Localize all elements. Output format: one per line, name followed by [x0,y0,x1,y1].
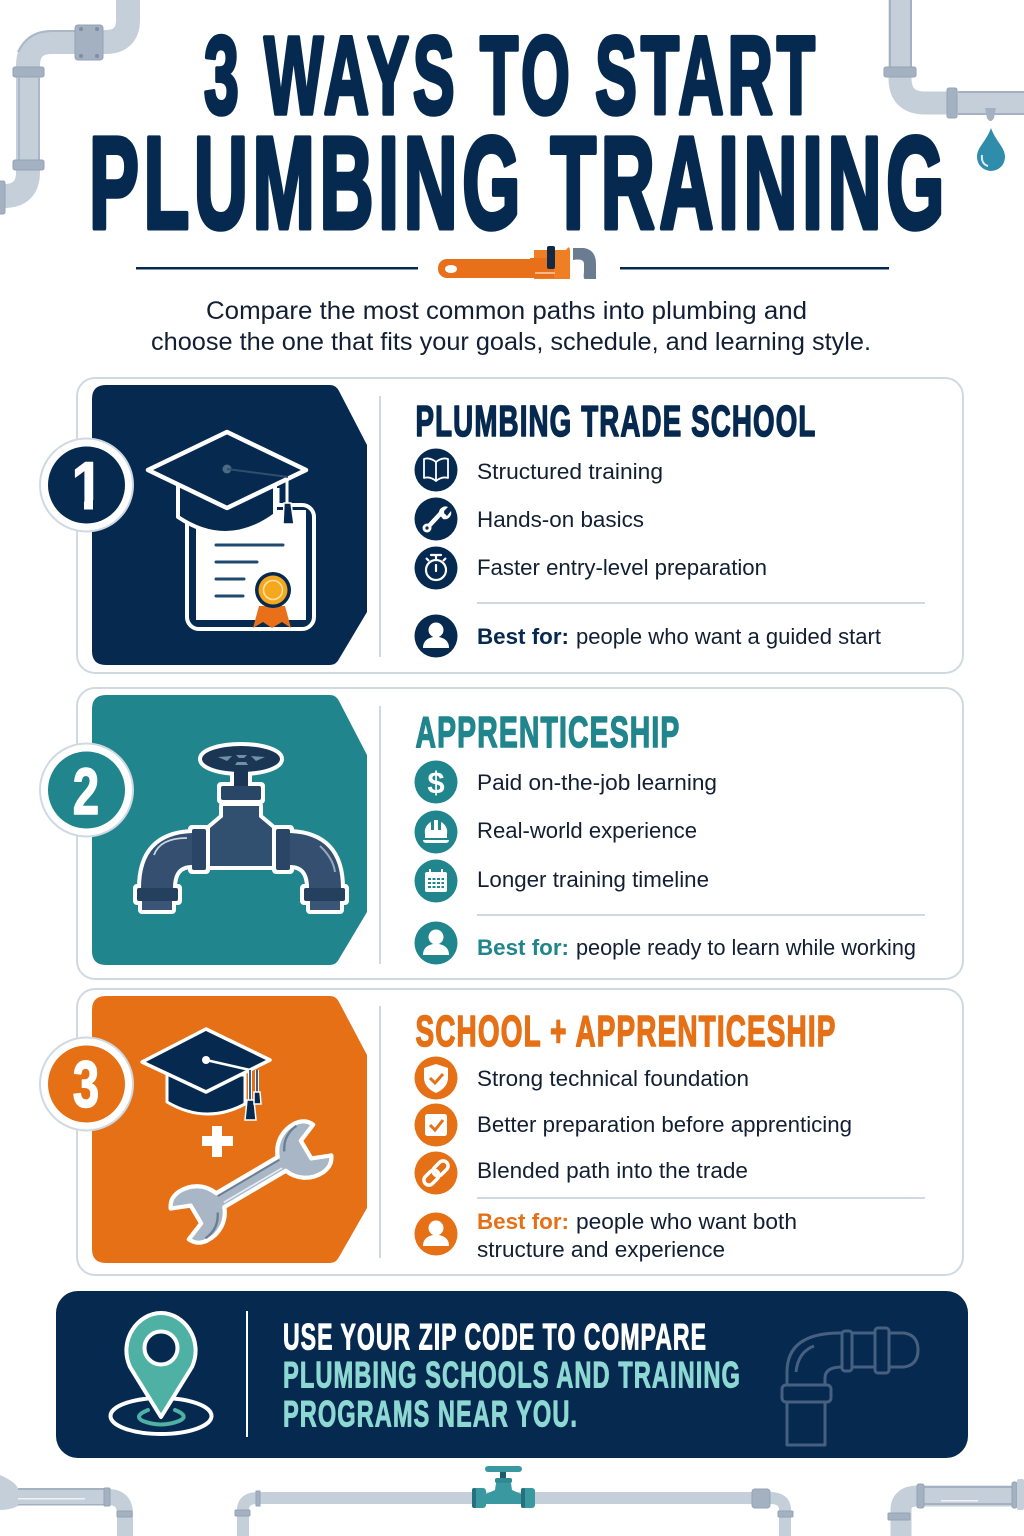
list item: better preparation [414,1104,852,1146]
icon panel: orange [92,996,367,1263]
banner text: USE YOUR ZIP CODE TO COMPARE [283,1316,707,1358]
subtitle: choose the one that fits your goals, schedule, and learning style. [151,328,871,356]
icon: location pin [110,1313,212,1434]
number badge 2: 2 [73,755,99,829]
call to action banner [56,1291,968,1458]
list item: paid learning: Paid on-the-job learning [477,770,717,795]
list item: faster preparation: Faster entry-level preparation [477,555,767,580]
list item: paid learning: $ [427,765,445,800]
decorative pipe: top left [0,0,128,214]
best for: guided start: people who want a guided start [576,624,881,649]
best for: learn while working [414,922,916,964]
list item: longer timeline [414,860,709,902]
icon panel: navy [92,385,367,665]
list item: blended path [414,1152,748,1194]
list item: blended path: Blended path into the trade [477,1158,748,1183]
number badge 1 [40,438,133,532]
icon: pipe wrench [438,246,596,279]
best for: guided start [414,614,881,658]
list item: better preparation: Better preparation before apprenticing [477,1112,852,1137]
best for: structure and experience: Best for: [477,1209,569,1234]
list item: faster preparation [414,546,767,590]
decorative pipe: bottom centre with valve [235,1466,793,1536]
decorative pipe: bottom left [0,1475,132,1536]
list item: hands-on basics: Hands-on basics [477,507,644,532]
icon: wrench [165,1116,337,1248]
number badge 3 [40,1038,133,1130]
panel: plumbing trade school [40,378,963,673]
best for: learn while working: people ready to learn while working [576,935,916,960]
heading: APPRENTICESHIP [416,708,680,757]
icon: graduation cap and diploma [148,432,314,629]
best for: guided start: Best for: [477,624,569,649]
title [89,14,949,256]
icon: ghost pipe elbow [782,1328,918,1445]
number badge 1: 1 [71,449,104,524]
icon: valve and pipes [137,746,345,910]
icon: graduation cap [142,1029,270,1120]
list item: real-world experience: Real-world experience [477,818,697,843]
banner text: PROGRAMS NEAR YOU. [283,1394,578,1434]
list item: structured training [414,448,663,492]
best for: structure and experience: structure and experience [477,1237,725,1262]
icon: water drop [977,128,1005,171]
list item: strong foundation: Strong technical foundation [477,1066,749,1091]
subtitle [151,297,871,356]
decorative pipe: top right with leak [884,0,1024,171]
list item: real-world experience [414,810,697,854]
list item: hands-on basics [414,498,644,540]
icon: teal valve [472,1466,535,1508]
decorative pipe: bottom right [888,1479,1024,1536]
icon: plus [202,1126,233,1157]
list item: strong foundation [414,1056,749,1100]
title divider with pipe wrench [136,246,889,279]
panel: school + apprenticeship [40,989,963,1275]
panel: apprenticeship [40,688,963,979]
best for: structure and experience: people who want both [576,1209,797,1234]
list item: paid learning [414,760,717,804]
banner text: PLUMBING SCHOOLS AND TRAINING [283,1354,741,1396]
number badge 3: 3 [73,1048,99,1122]
banner text [283,1316,741,1434]
icon panel: teal [92,695,367,965]
number badge 2 [40,744,133,836]
list item: structured training: Structured training [477,459,663,484]
best for: structure and experience [414,1209,797,1262]
subtitle: Compare the most common paths into plumbing and [206,297,807,325]
best for: learn while working: Best for: [477,935,569,960]
list item: longer timeline: Longer training timeline [477,867,709,892]
